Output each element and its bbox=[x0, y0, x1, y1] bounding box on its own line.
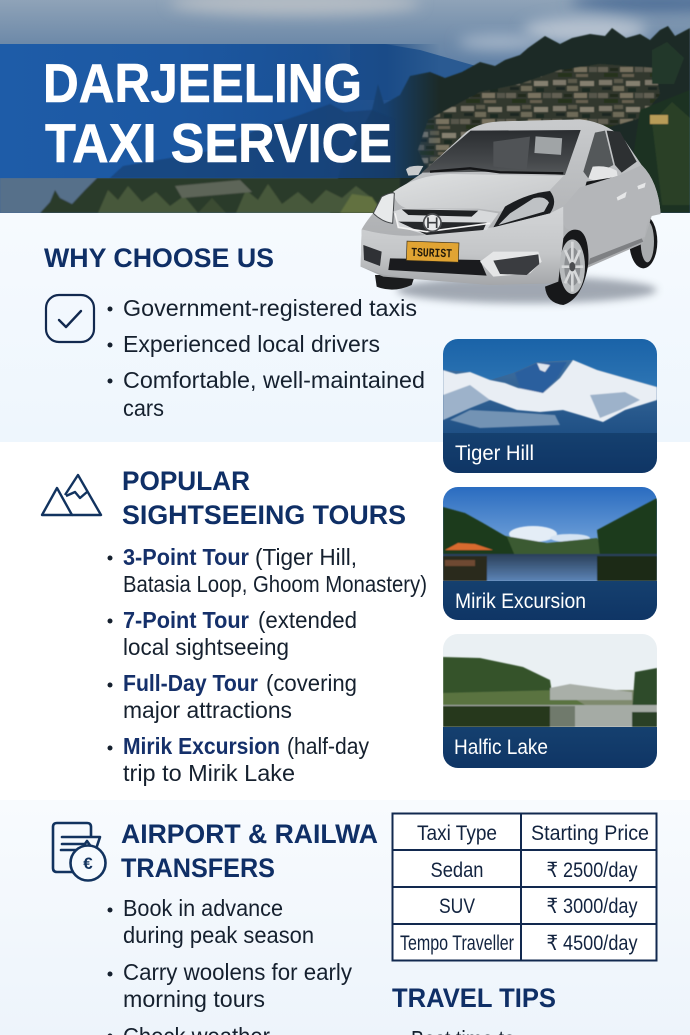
title: TAXI SERVICE bbox=[45, 112, 392, 174]
photo card: Halfic Lake bbox=[443, 634, 657, 768]
text block: tour list: (extended bbox=[258, 607, 357, 633]
car bbox=[361, 119, 661, 305]
title bbox=[43, 52, 392, 174]
bumper bbox=[361, 207, 563, 285]
heading: airport and railway transfers bbox=[121, 819, 378, 883]
heading: airport and railway transfers: TRANSFERS bbox=[121, 853, 275, 883]
heading: why choose us: WHY CHOOSE US bbox=[44, 243, 274, 273]
text block: tour list: Mirik Excursion bbox=[123, 733, 280, 759]
text block: tour list: (covering bbox=[266, 670, 357, 696]
text block: why choose us list: cars bbox=[123, 395, 164, 421]
price table: ₹ 2500/day bbox=[546, 859, 638, 882]
text block: why choose us list bbox=[108, 295, 425, 421]
text block: tour list: local sightseeing bbox=[123, 634, 289, 660]
heading: popular sightseeing tours bbox=[122, 466, 406, 530]
text block: tour list: major attractions bbox=[123, 697, 292, 723]
icon: document and money bag bbox=[53, 823, 106, 880]
price table: SUV bbox=[439, 895, 475, 918]
price table: Taxi Type bbox=[417, 822, 497, 845]
hood bbox=[393, 174, 563, 212]
text block: tour list: Batasia Loop, Ghoom Monastery) bbox=[123, 571, 427, 597]
heading: popular sightseeing tours: POPULAR bbox=[122, 466, 250, 496]
licence plate bbox=[406, 241, 459, 262]
text block: advice list: during peak season bbox=[123, 922, 314, 948]
text block: tour list: Full-Day Tour bbox=[123, 670, 258, 696]
heading: airport and railway transfers: AIRPORT & RAILWA bbox=[121, 819, 378, 849]
text block: why choose us list: Experienced local drivers bbox=[123, 331, 380, 357]
windshield bbox=[422, 130, 581, 175]
icon: document and money bag: € bbox=[83, 854, 93, 873]
price table bbox=[392, 813, 657, 961]
icon: checkbox bbox=[46, 295, 94, 342]
front wheel bbox=[545, 230, 588, 305]
text block: tour list: 3-Point Tour bbox=[123, 544, 249, 570]
text block: tour list bbox=[108, 544, 427, 786]
text block: tour list: trip to Mirik Lake bbox=[123, 760, 295, 786]
text block: advice list: morning tours bbox=[123, 986, 265, 1012]
title: DARJEELING bbox=[43, 52, 362, 114]
text block: advice list bbox=[108, 895, 352, 1035]
label: Halfic Lake bbox=[454, 736, 548, 759]
hero photo: hillside town bbox=[0, 0, 690, 213]
price table: Starting Price bbox=[531, 822, 649, 845]
text block: why choose us list: Comfortable, well-maintained bbox=[123, 367, 425, 393]
price table: ₹ 3000/day bbox=[546, 895, 638, 918]
text block: advice list: Book in advance bbox=[123, 895, 283, 921]
text block: why choose us list: Government-registered taxis bbox=[123, 295, 417, 321]
text block: tour list: (half-day bbox=[287, 733, 369, 759]
price table: ₹ 4500/day bbox=[546, 932, 638, 955]
text block: tour list: 7-Point Tour bbox=[123, 607, 249, 633]
text block: tour list: (Tiger Hill, bbox=[255, 544, 357, 570]
photo card: Mirik Excursion bbox=[443, 487, 657, 620]
side windows bbox=[583, 131, 613, 178]
heading: popular sightseeing tours: SIGHTSEEING TOURS bbox=[122, 500, 406, 530]
grille bbox=[393, 208, 498, 235]
text block: advice list: Carry woolens for early bbox=[123, 959, 352, 985]
photo card: Tiger Hill bbox=[443, 339, 657, 473]
side panel bbox=[563, 165, 661, 263]
price table: Tempo Traveller bbox=[400, 932, 514, 955]
lower treeline bbox=[0, 178, 400, 213]
silhouette bbox=[361, 119, 661, 285]
heading: travel tips: TRAVEL TIPS bbox=[392, 983, 556, 1013]
label: Tiger Hill bbox=[455, 442, 534, 465]
title banner bbox=[0, 44, 440, 178]
icon: mountains bbox=[42, 475, 101, 515]
headlights bbox=[373, 193, 394, 223]
licence plate: TSURIST bbox=[411, 246, 453, 261]
label: Mirik Excursion bbox=[455, 590, 586, 613]
price table: Sedan bbox=[430, 859, 484, 882]
